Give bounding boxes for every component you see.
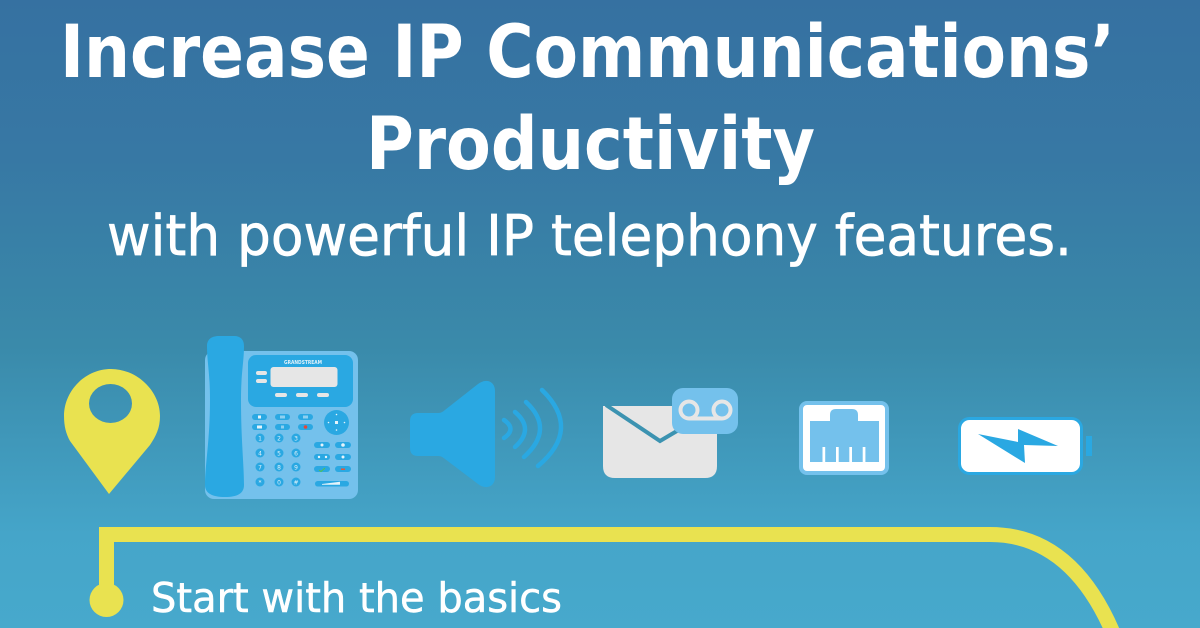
port frame: [801, 403, 887, 473]
icon: speaker: [410, 381, 561, 487]
phone body: [205, 351, 358, 499]
envelope body: [603, 406, 717, 478]
record dot: [304, 425, 307, 429]
dial pad numbers: 5: [277, 450, 281, 458]
dial pad numbers: 7: [258, 464, 262, 472]
yellow route line: [106, 534, 1116, 628]
title: [60, 10, 1115, 187]
dial pad numbers: 3: [294, 436, 298, 442]
dial pad numbers: [258, 436, 299, 486]
voicemail symbol: [680, 402, 730, 418]
side keys: [314, 442, 351, 486]
dial pad numbers: 8: [277, 464, 281, 472]
sound waves: [504, 390, 561, 466]
icon: location pin: [64, 369, 160, 494]
function keys: [252, 414, 313, 430]
battery terminal: [1086, 436, 1092, 456]
dial pad numbers: *: [258, 480, 262, 486]
navigation pad: [324, 410, 349, 435]
icon: voicemail envelope: [603, 388, 738, 478]
route start dot: [90, 583, 124, 617]
key glyphs: [319, 468, 325, 472]
handset: [205, 336, 244, 497]
dial pad numbers: 0: [277, 480, 281, 486]
dial pad numbers: #: [293, 480, 299, 486]
port pin slots: [822, 447, 865, 462]
icon: battery: [960, 418, 1092, 474]
icon: desk phone: [205, 336, 358, 499]
lightning bolt: [978, 429, 1058, 463]
subtitle: with powerful IP telephony features.: [107, 204, 1072, 269]
speaker cone: [410, 381, 495, 487]
dial pad numbers: 4: [258, 450, 262, 458]
screen buttons: [256, 371, 329, 397]
title: Productivity: [366, 102, 815, 187]
dial pad numbers: 1: [258, 436, 262, 442]
section heading: Start with the basics: [151, 574, 562, 622]
battery shell: [960, 418, 1082, 474]
display: [270, 367, 338, 387]
port socket: [810, 409, 879, 462]
screen panel: [248, 355, 353, 407]
brand label: GRANDSTREAM: [284, 360, 322, 366]
dial pad: [256, 434, 300, 486]
dial pad numbers: 2: [277, 436, 281, 442]
dial pad numbers: 6: [294, 450, 298, 458]
envelope flap line: [606, 405, 682, 441]
icon: ethernet port: [801, 403, 887, 473]
voicemail badge: [672, 388, 738, 434]
dial pad numbers: 9: [294, 464, 298, 472]
